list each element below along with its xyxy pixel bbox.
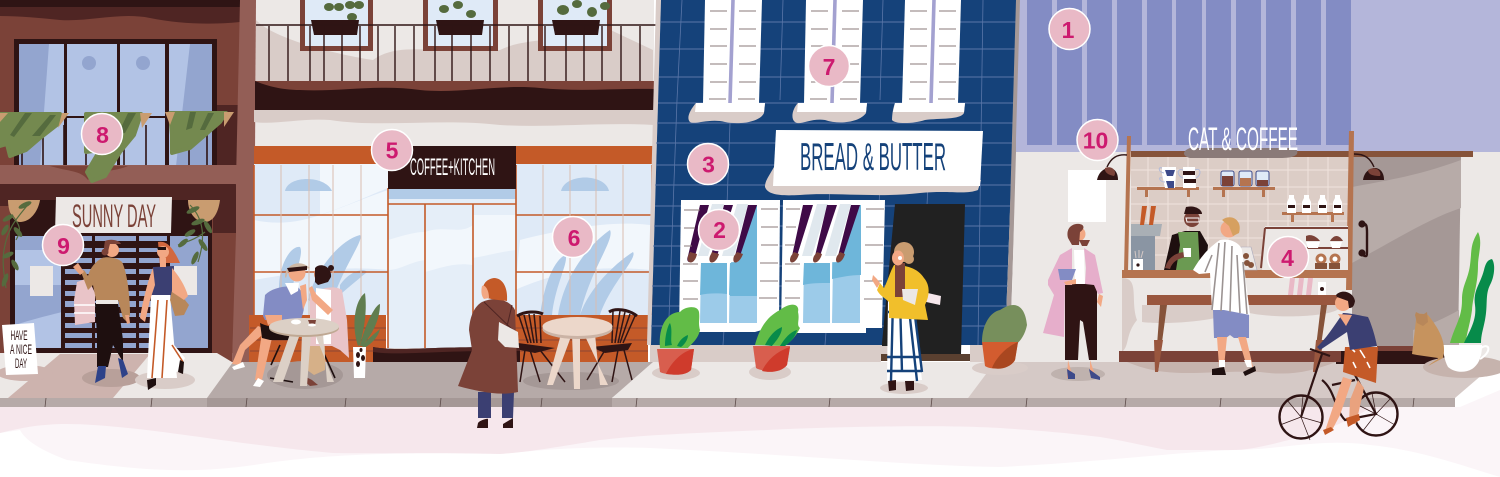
upper shutter windows xyxy=(688,0,965,123)
building: Coffee + Kitchen: COFFEE+KITCHEN xyxy=(410,154,495,181)
badge 7: 7 xyxy=(823,54,835,80)
person: woman in yellow jacket xyxy=(872,242,941,391)
door xyxy=(881,204,965,354)
plant 3 xyxy=(982,305,1027,369)
badge 10: 10 xyxy=(1083,128,1108,154)
plant pots xyxy=(657,305,1027,375)
badge 3: 3 xyxy=(702,152,715,178)
person: barista xyxy=(1164,207,1208,270)
sign: Coffee+Kitchen xyxy=(388,146,516,189)
lower windows with awnings xyxy=(679,200,885,333)
badge 6 xyxy=(552,216,594,258)
building: Bread & Butter xyxy=(647,0,1022,362)
cat xyxy=(1412,312,1444,366)
sign: Sunny Day: SUNNY DAY xyxy=(72,198,156,234)
badge 5 xyxy=(372,130,412,170)
badge 2 xyxy=(698,210,740,250)
coffee machine xyxy=(1131,206,1162,270)
mat xyxy=(1336,351,1447,364)
sidewalk and curb xyxy=(0,353,1497,407)
sign: Sunny Day xyxy=(55,197,172,234)
sign: have a nice day: A NICE xyxy=(10,341,32,357)
shutter xyxy=(61,236,170,350)
badge 9 xyxy=(42,224,84,266)
building: Coffee + Kitchen xyxy=(249,0,657,362)
building: Sunny Day xyxy=(0,0,256,362)
person: woman in striped trousers xyxy=(140,242,189,390)
badge 1: 1 xyxy=(1062,17,1075,43)
plant 1 xyxy=(657,307,700,375)
badge 1 xyxy=(1049,8,1090,50)
orange planter wall xyxy=(249,315,648,362)
kiosk xyxy=(1097,121,1473,374)
wall lamps xyxy=(1097,154,1384,180)
orange fascia xyxy=(254,146,654,165)
balcony plants xyxy=(0,112,234,181)
person: cyclist with bicycle xyxy=(1280,292,1398,440)
person: woman in brown coat from behind xyxy=(458,278,519,428)
sign: have a nice day xyxy=(2,323,38,375)
pillar xyxy=(232,0,256,362)
badge 4 xyxy=(1268,236,1308,278)
shelves xyxy=(1137,187,1344,222)
person: woman in pink coat xyxy=(1043,224,1103,380)
cafe table xyxy=(269,318,339,386)
milk bottles xyxy=(1287,195,1342,213)
kiosk: CAT & COFFEE xyxy=(1188,121,1298,157)
items on counter xyxy=(1288,278,1326,295)
shop glass xyxy=(254,164,654,348)
sign: Bread & Butter: BREAD & BUTTER xyxy=(800,136,946,179)
balcony railing xyxy=(256,25,657,81)
jars xyxy=(1221,171,1269,186)
base strip xyxy=(650,345,1005,362)
balcony base xyxy=(255,81,655,110)
badge 5: 5 xyxy=(386,138,399,164)
badge 6: 6 xyxy=(568,225,580,251)
badge 9: 9 xyxy=(57,233,70,259)
cups xyxy=(1159,167,1200,188)
person: bearded man in pink jacket xyxy=(304,265,349,386)
badge 2: 2 xyxy=(713,217,726,243)
person: man in hat xyxy=(232,263,335,387)
display case xyxy=(1261,226,1348,270)
building: Cat & Coffee xyxy=(1006,0,1500,374)
upper window xyxy=(0,39,217,166)
wall poster xyxy=(1068,170,1106,222)
second cafe table with chairs xyxy=(517,310,637,389)
badge 7 xyxy=(808,46,850,86)
road xyxy=(0,390,1500,477)
plant 2 xyxy=(753,305,800,372)
sign: Cat & Coffee xyxy=(1184,121,1298,158)
hanging plants xyxy=(0,200,220,288)
badge 10 xyxy=(1077,120,1118,160)
sign: Bread & Butter xyxy=(765,130,983,195)
posters xyxy=(30,266,197,296)
badge 8: 8 xyxy=(96,122,109,148)
shop front xyxy=(10,200,212,353)
tile grid xyxy=(651,22,1018,326)
badge 3 xyxy=(688,144,728,184)
badge 4: 4 xyxy=(1281,245,1294,271)
cookie jar xyxy=(1237,247,1257,270)
upper windows with planters xyxy=(300,0,612,51)
plant: white spotted vase xyxy=(353,293,380,378)
floor shadows xyxy=(267,361,619,390)
sign: have a nice day: HAVE xyxy=(10,327,28,343)
badge 8 xyxy=(82,114,122,154)
grey door panel xyxy=(1352,157,1461,346)
person: woman in tan sweater xyxy=(73,240,130,383)
sign: have a nice day: DAY xyxy=(15,355,27,371)
person: customer in striped shirt xyxy=(1193,217,1256,376)
plant in white cup xyxy=(1443,232,1494,372)
